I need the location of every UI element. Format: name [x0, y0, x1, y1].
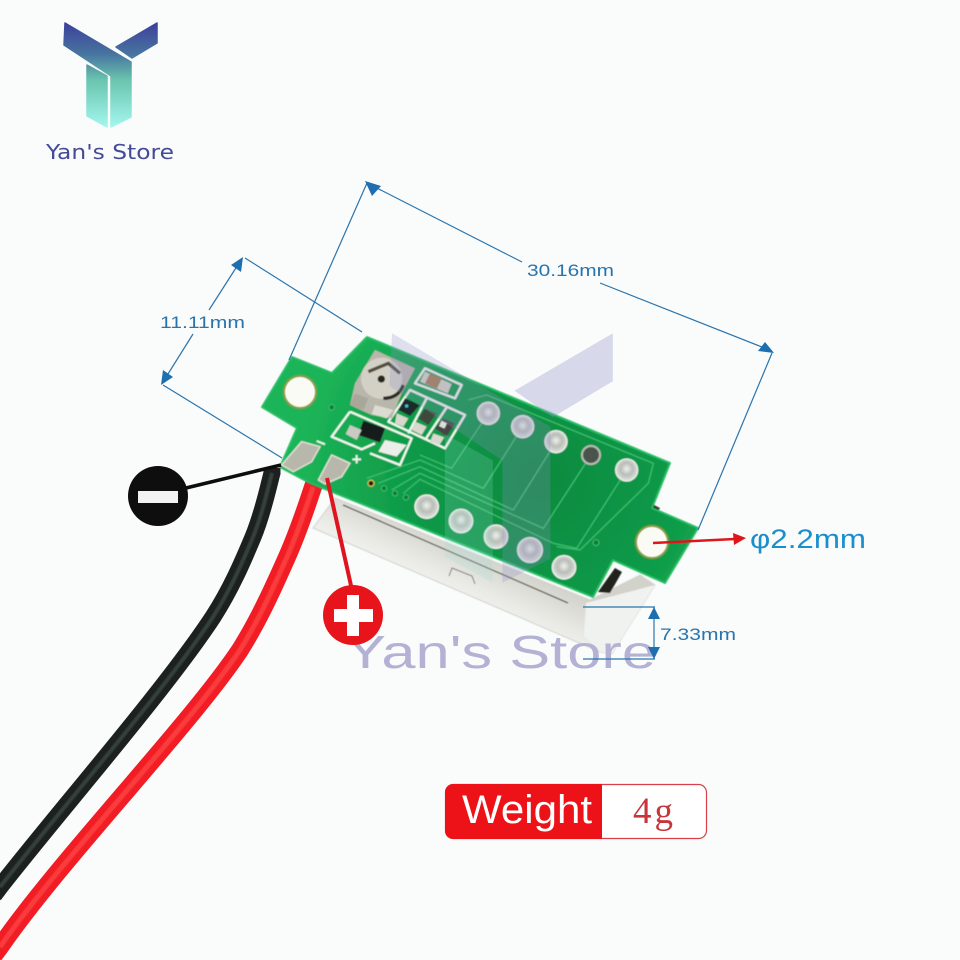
weight badge	[445, 784, 706, 839]
transistor	[358, 421, 385, 442]
gold via	[368, 480, 374, 486]
body end facet	[584, 585, 655, 654]
stamped mark	[449, 568, 475, 584]
dark recess under tab	[598, 568, 622, 593]
solder pads: bottom row	[415, 495, 576, 579]
trace lines	[367, 395, 653, 550]
callout: positive terminal	[323, 478, 383, 645]
callout: hole diameter: φ2.2mm	[750, 524, 866, 554]
SMD resistors	[395, 398, 455, 445]
weight label: Weight	[462, 788, 592, 832]
trimmer potentiometer	[350, 350, 415, 418]
black wire	[0, 468, 272, 895]
logo text: Yan's Store	[45, 140, 174, 164]
product: metal display body	[313, 498, 660, 654]
traces and pads	[329, 395, 653, 579]
small vias	[329, 405, 599, 546]
mounting holes	[284, 376, 668, 558]
SMD capacitor	[420, 372, 452, 393]
red wire	[0, 482, 315, 955]
dark gap line under board	[343, 505, 568, 603]
watermark text: Yan's Store	[345, 626, 656, 678]
logo mark	[64, 23, 157, 127]
logo: Yan's Store	[45, 23, 174, 164]
dimension: length 30.16mm: 30.16mm	[527, 261, 614, 280]
weight value: 4g	[633, 791, 673, 832]
watermark logo	[390, 333, 613, 583]
dimension: height 7.33mm: 7.33mm	[660, 625, 736, 644]
circuit board	[262, 337, 698, 597]
callout: negative terminal	[128, 465, 281, 526]
dimension: length 30.16mm	[289, 181, 774, 530]
dimension: height 7.33mm	[583, 607, 736, 659]
dimension: width 11.11mm: 11.11mm	[160, 313, 245, 332]
board outline	[262, 337, 698, 597]
silk screen outlines	[332, 368, 465, 465]
solder pads: top row	[477, 402, 638, 481]
silk polarity marks	[317, 441, 361, 463]
dark solder pad	[582, 446, 600, 464]
dimension: width 11.11mm	[160, 257, 362, 458]
callout: hole diameter	[653, 524, 866, 554]
wire solder pads	[282, 442, 350, 484]
components	[282, 350, 465, 486]
